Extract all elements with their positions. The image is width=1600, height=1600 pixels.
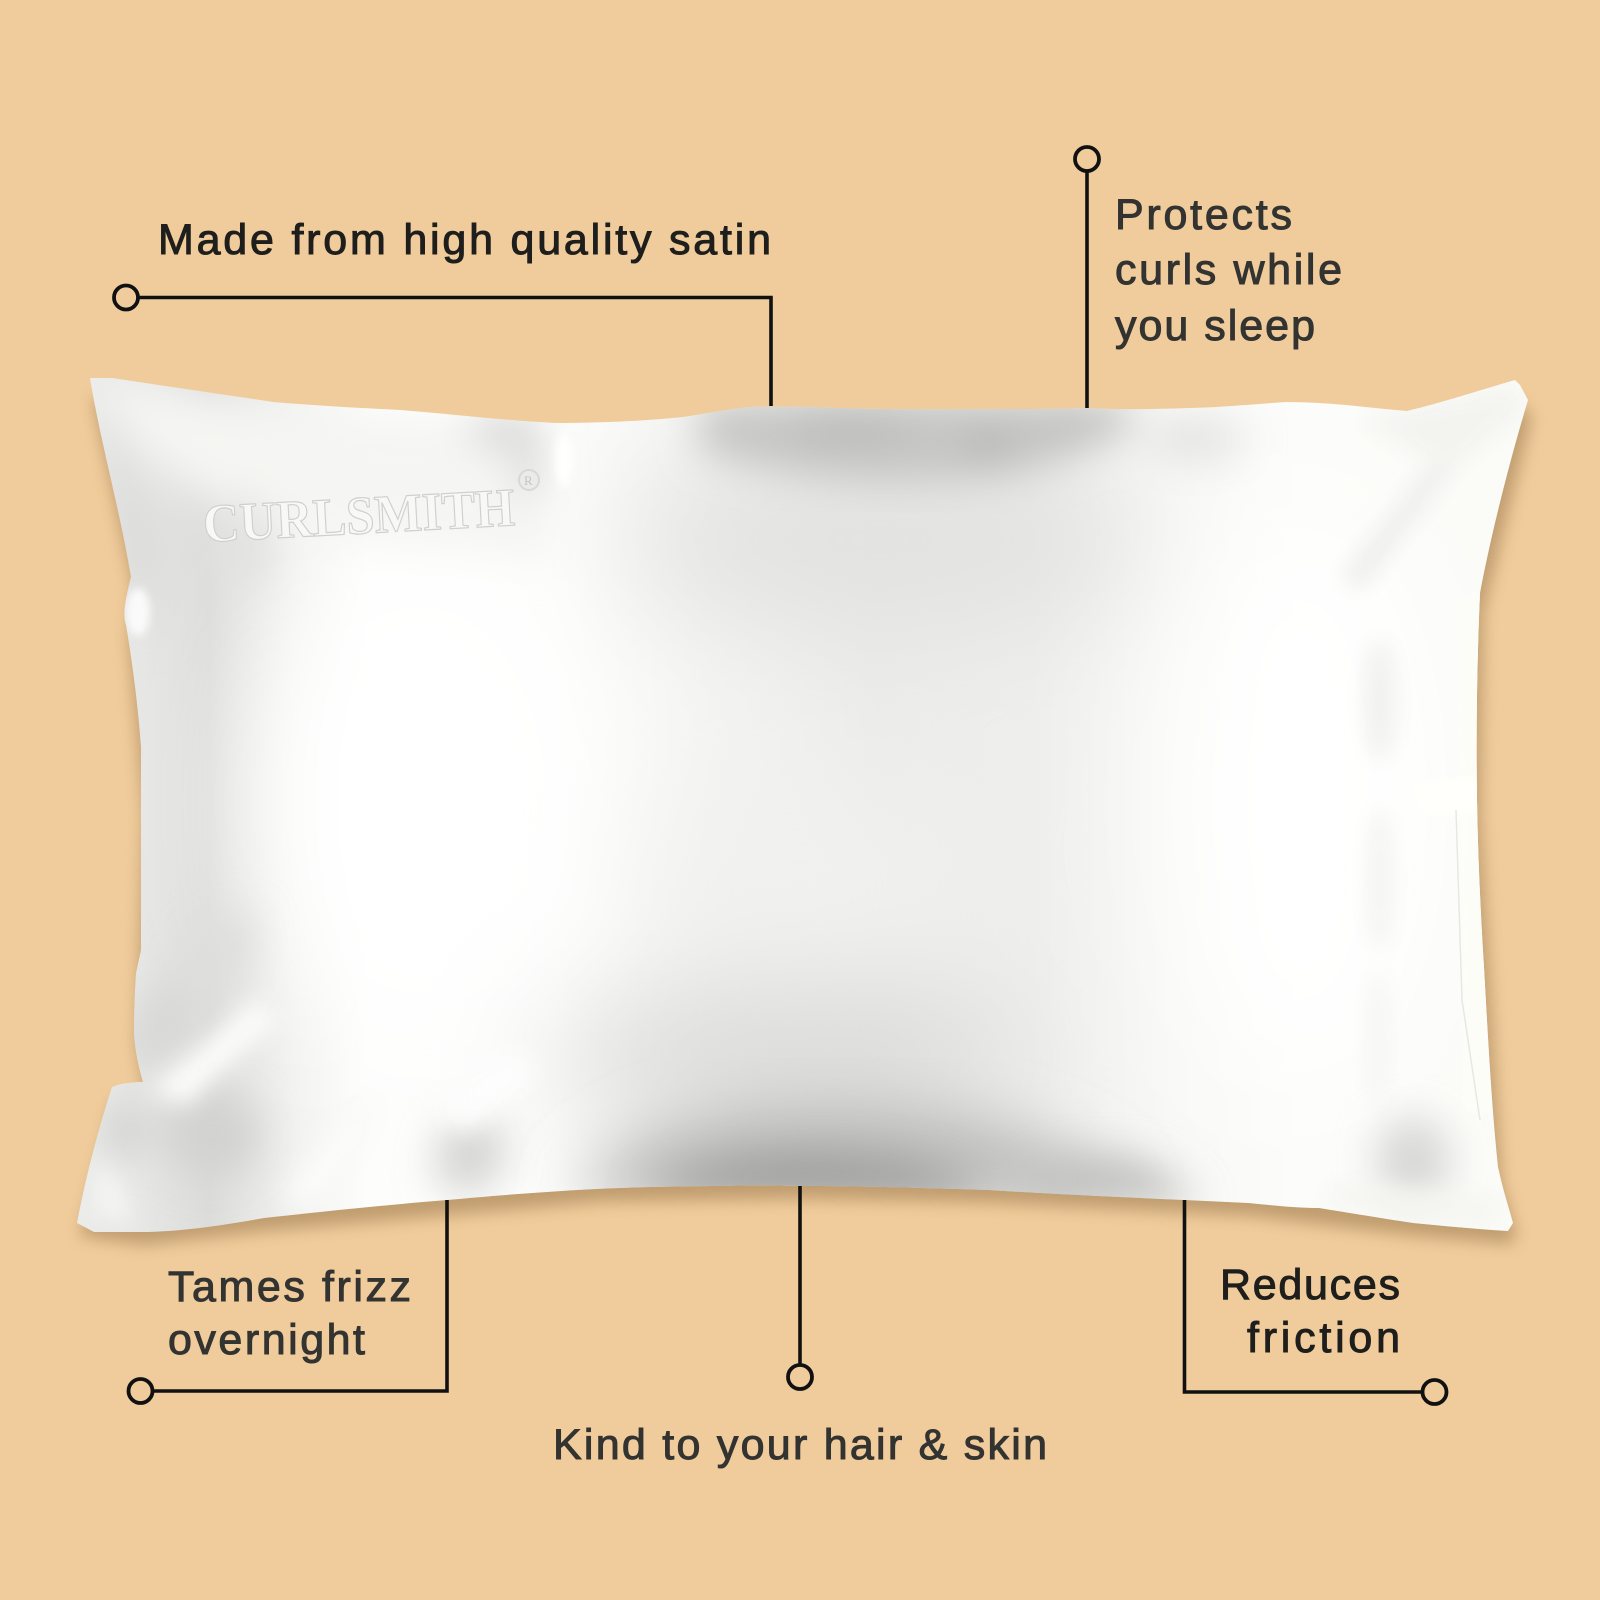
label: protects curls while you sleep: Protects <box>1115 191 1292 239</box>
bottom left white folds <box>100 1004 488 1212</box>
satin base <box>60 360 1550 1250</box>
label: reduces friction: Reduces <box>1220 1261 1400 1309</box>
leader line and marker <box>114 286 771 406</box>
label: tames frizz overnight: overnight <box>168 1316 365 1364</box>
embroidered brand logo: CURLSMITH <box>201 477 516 554</box>
label: protects curls while you sleep: curls while <box>1115 246 1342 294</box>
pillow <box>60 360 1550 1250</box>
label: protects curls while you sleep <box>1115 191 1342 350</box>
top left satin <box>108 379 554 582</box>
grey top band <box>700 401 1245 481</box>
broad central tone <box>210 474 1095 1130</box>
callout: made from high quality satin <box>114 216 771 406</box>
pillow shadow <box>80 398 1531 1245</box>
label: tames frizz overnight <box>168 1263 411 1364</box>
callout: protects curls while you sleep <box>1075 147 1342 408</box>
grey bottom band <box>570 1105 1130 1200</box>
label: reduces friction: friction <box>1247 1314 1400 1362</box>
callout: reduces friction <box>1184 1200 1446 1404</box>
pocket flap <box>1455 591 1492 1120</box>
embroidered brand logo: R <box>524 473 533 488</box>
right side folds <box>1332 400 1497 1228</box>
leader line and marker <box>788 1186 812 1389</box>
label: protects curls while you sleep: you sleep <box>1115 302 1315 350</box>
label: kind to your hair and skin: Kind to your hair & skin <box>553 1421 1047 1469</box>
leader line and marker <box>1075 147 1099 408</box>
label: tames frizz overnight: Tames frizz <box>168 1263 411 1311</box>
callout: tames frizz overnight <box>128 1200 447 1403</box>
leader line and marker <box>128 1200 447 1403</box>
callout: kind to your hair and skin <box>553 1186 1047 1469</box>
label: reduces friction <box>1220 1261 1400 1362</box>
leader line and marker <box>1184 1200 1446 1404</box>
label: made from high quality satin: Made from high quality satin <box>158 216 771 264</box>
